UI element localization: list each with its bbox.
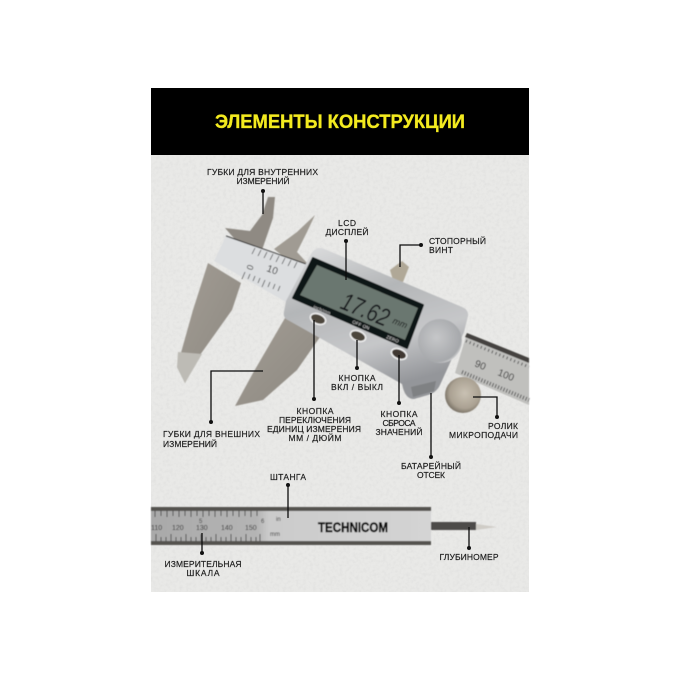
scale numbers bbox=[151, 517, 281, 538]
callout: inner jaws: ИЗМЕРЕНИЙ bbox=[236, 175, 290, 186]
header band bbox=[151, 88, 529, 155]
button labels: OFF ON bbox=[352, 319, 370, 331]
callout: LCD display: LCD bbox=[338, 218, 356, 228]
ruler on slider bbox=[214, 236, 306, 302]
inner jaw left bbox=[225, 197, 275, 250]
callout: outer jaws: ИЗМЕРЕНИЙ bbox=[163, 438, 217, 449]
callout: reset button: ЗНАЧЕНИЙ bbox=[376, 426, 422, 437]
callout: battery compartment bbox=[401, 393, 461, 480]
callout: measuring scale bbox=[164, 533, 242, 578]
callout: beam: ШТАНГА bbox=[270, 472, 306, 482]
battery compartment bbox=[411, 381, 436, 397]
outer jaw left tip bbox=[177, 352, 202, 383]
callout: on off button: ВКЛ / ВЫКЛ bbox=[331, 382, 383, 392]
callout: locking screw: СТОПОРНЫЙ bbox=[429, 235, 486, 246]
callout: reset button: СБРОСА bbox=[382, 418, 416, 428]
LCD bezel bbox=[293, 258, 423, 348]
callout: depth gauge bbox=[440, 527, 499, 562]
LCD reading: mm bbox=[391, 316, 409, 331]
slider body bbox=[284, 248, 468, 399]
callout: beam bbox=[270, 472, 306, 518]
depth rod tip bbox=[476, 524, 497, 530]
button labels bbox=[313, 304, 400, 344]
callout: locking screw: ВИНТ bbox=[429, 245, 453, 255]
bottom bar bbox=[151, 507, 497, 545]
background panel bbox=[151, 88, 529, 592]
scale numbers: 6 bbox=[261, 519, 265, 525]
callout: roller: МИКРОПОДАЧИ bbox=[449, 430, 518, 440]
right beam: 100 bbox=[496, 368, 516, 384]
outer jaw left bbox=[177, 263, 241, 383]
callout: roller bbox=[449, 397, 518, 440]
callout: locking screw bbox=[400, 235, 486, 267]
button labels: inch/mm bbox=[313, 304, 331, 316]
callout: LCD display bbox=[326, 218, 368, 280]
thumb knob bbox=[418, 319, 462, 363]
main caliper photo bbox=[177, 197, 529, 413]
locking screw bbox=[390, 261, 409, 282]
callout: inner jaws: ГУБКИ ДЛЯ ВНУТРЕННИХ bbox=[207, 167, 318, 177]
button: on off bbox=[349, 328, 367, 344]
callout: inner jaws bbox=[207, 167, 318, 214]
scale numbers: mm bbox=[270, 532, 280, 538]
callout: measuring scale: ИЗМЕРИТЕЛЬНАЯ bbox=[164, 559, 242, 569]
callout: on off button bbox=[331, 340, 383, 392]
title: ЭЛЕМЕНТЫ КОНСТРУКЦИИ bbox=[215, 112, 465, 133]
callout: on off button: КНОПКА bbox=[338, 373, 376, 383]
callout: outer jaws: ГУБКИ ДЛЯ ВНЕШНИХ bbox=[163, 429, 260, 439]
scale numbers: in bbox=[276, 517, 281, 523]
depth rod bbox=[431, 522, 476, 530]
callout: depth gauge: ГЛУБИНОМЕР bbox=[440, 552, 499, 562]
scale numbers: 150 bbox=[245, 525, 257, 532]
scale numbers: 140 bbox=[221, 525, 233, 532]
scale numbers: 130 bbox=[196, 525, 208, 532]
LCD screen bbox=[300, 265, 418, 340]
right beam bbox=[455, 333, 529, 405]
scale numbers: 5 bbox=[199, 519, 203, 525]
callout: measuring scale: ШКАЛА bbox=[186, 568, 220, 578]
callout: LCD display: ДИСПЛЕЙ bbox=[326, 226, 368, 237]
callout: battery compartment: БАТАРЕЙНЫЙ bbox=[401, 460, 461, 471]
scale numbers: 120 bbox=[172, 525, 184, 532]
scale numbers: 110 bbox=[151, 525, 162, 532]
callout: units button bbox=[267, 320, 361, 443]
inner jaw right bbox=[274, 215, 315, 264]
beam numbers: 90 bbox=[473, 359, 488, 373]
callout: outer jaws bbox=[163, 371, 263, 449]
callout: battery compartment: ОТСЕК bbox=[417, 470, 445, 480]
callout: roller: РОЛИК bbox=[488, 421, 518, 431]
callout: reset button bbox=[376, 355, 422, 437]
button: units bbox=[309, 311, 327, 327]
callout: units button: ММ / ДЮЙМ bbox=[288, 432, 342, 443]
scale ticks bbox=[155, 511, 257, 517]
outer jaw right bbox=[235, 318, 320, 406]
callout: units button: КНОПКА bbox=[296, 406, 334, 416]
LCD reading: 17.62 bbox=[337, 288, 394, 332]
callout: reset button: КНОПКА bbox=[380, 409, 418, 419]
button labels: ZERO bbox=[386, 334, 400, 344]
button: zero bbox=[390, 346, 408, 362]
callout: units button: ЕДИНИЦ ИЗМЕРЕНИЯ bbox=[267, 424, 361, 434]
ruler digits: 0 bbox=[244, 263, 256, 271]
micro-feed roller bbox=[445, 377, 481, 413]
brand logo: TECHNICOM bbox=[318, 519, 388, 535]
callout: units button: ПЕРЕКЛЮЧЕНИЯ bbox=[279, 415, 351, 425]
ruler on slider: 10 bbox=[265, 263, 280, 278]
